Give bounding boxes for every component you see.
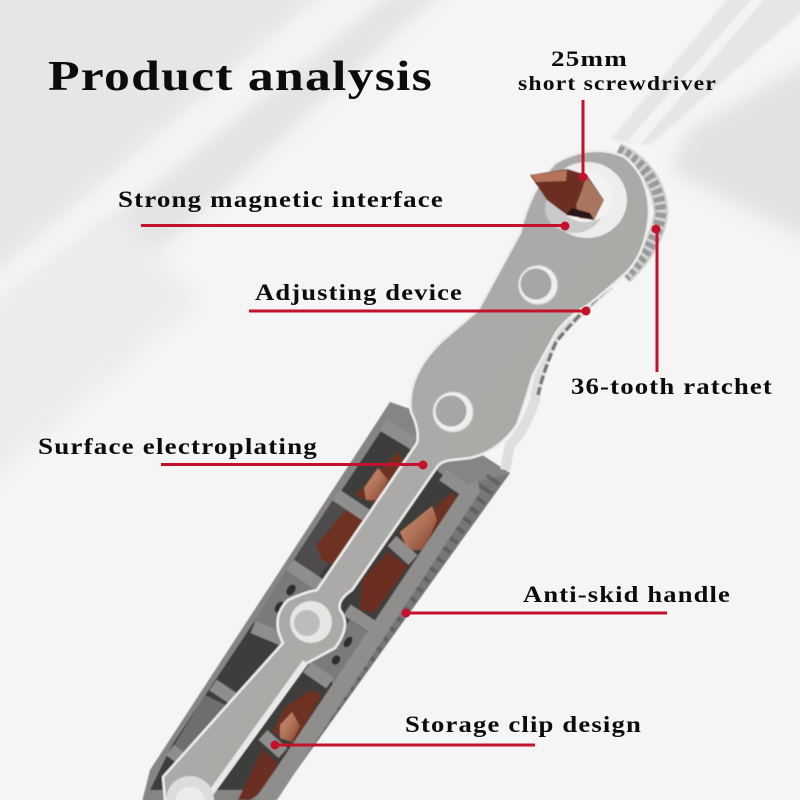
bit lower: [238, 690, 322, 800]
upper pivot pin: [518, 266, 558, 304]
label: adjusting device: Adjusting device: [255, 280, 463, 305]
pocket left of middle pin: [254, 570, 318, 640]
copper bits: [238, 452, 458, 800]
right rail: [254, 480, 480, 800]
handle cross ribs: [170, 425, 465, 767]
label: 25mm: 25mm: [551, 46, 628, 71]
lower compartment gray floor: [168, 695, 240, 775]
storage compartments: [150, 428, 462, 790]
middle pivot pin: [433, 392, 473, 432]
storage holes: [273, 583, 354, 666]
callout: storage clip design: [270, 740, 535, 750]
callout: anti-skid handle: [402, 608, 667, 618]
bit upper left: [316, 452, 405, 568]
label: short screwdriver: short screwdriver: [518, 73, 717, 95]
callout: 36-tooth ratchet: [652, 224, 660, 372]
handle pivot pin: [290, 601, 332, 643]
bit upper right: [360, 492, 458, 612]
anti-skid grip strip: [254, 473, 510, 800]
label: surface electroplating: Surface electroplating: [38, 434, 318, 459]
label: anti-skid handle: Anti-skid handle: [523, 582, 731, 607]
title: Product analysis: [48, 54, 433, 100]
label: 36-tooth ratchet: 36-tooth ratchet: [571, 374, 773, 399]
bottom pivot pin: [166, 776, 214, 800]
callout lines and dots: [141, 100, 667, 750]
main lever plate: [163, 151, 649, 800]
handle frame: [140, 402, 510, 800]
callout: 25mm short screwdriver: [578, 100, 588, 182]
pocket right of middle pin: [310, 620, 372, 685]
callout: adjusting device: [249, 306, 590, 316]
label: strong magnetic interface: Strong magnetic interface: [118, 187, 444, 212]
rear lever plate: [505, 285, 610, 470]
ratchet gear teeth: [618, 150, 661, 277]
callout: strong magnetic interface: [141, 222, 570, 230]
tool: folding ratchet screwdriver: [140, 100, 667, 800]
lower lever arm highlight: [208, 660, 307, 793]
compartment gray floor: [290, 495, 366, 580]
tool body shapes: [140, 150, 661, 800]
copper screwdriver bit: [530, 169, 604, 220]
magnetic socket: [545, 162, 627, 238]
callout: surface electroplating: [161, 460, 428, 470]
label: storage clip design: Storage clip design: [405, 712, 642, 737]
